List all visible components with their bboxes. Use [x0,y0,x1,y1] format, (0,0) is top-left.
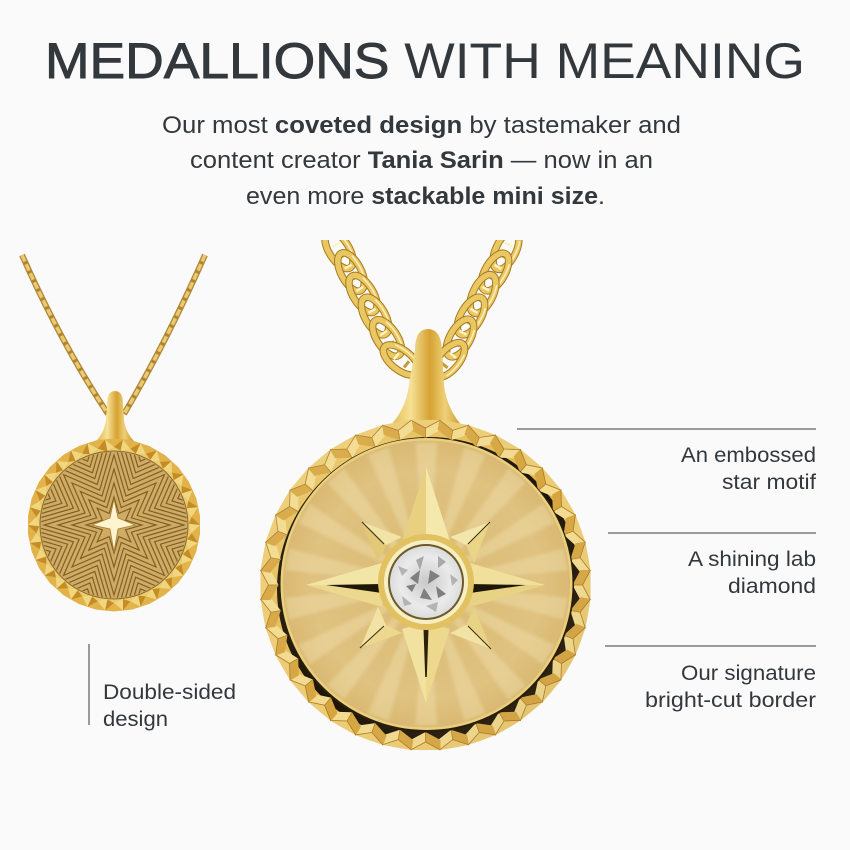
callout: double-sided design: design [103,708,168,731]
callout: lab diamond: A shining lab [688,548,816,571]
callout: lab diamond [688,548,816,598]
callout: bright-cut border: Our signature [681,662,816,685]
small pendant bail [96,391,134,441]
embossed ray disc [254,427,599,741]
callout: bright-cut border: bright-cut border [645,689,816,712]
small pendant: double-sided reverse [19,254,208,612]
callout line: embossed star motif [517,428,816,430]
subtitle text: Our most coveted design by tastemaker and [162,112,681,139]
thin shadow around disc [279,438,574,732]
title: MEDALLIONS WITH MEANING [45,33,805,89]
callout: double-sided design: Double-sided [103,681,236,704]
subtitle text [162,112,681,210]
bright-cut border teeth [247,407,604,763]
large pendant: front with lab diamond [260,240,591,750]
subtitle text: even more stackable mini size. [246,183,605,210]
subtitle text: content creator Tania Sarin — now in an [190,147,653,174]
small pendant chevron star face [40,450,188,600]
callout: double-sided design [103,681,236,731]
large pendant chain [321,240,523,380]
shadow crescent behind border teeth [277,437,581,741]
callout line: double-sided design [88,644,90,725]
lab diamond in bezel [378,534,474,630]
callout: lab diamond: diamond [728,575,816,598]
callout line: lab diamond [608,532,816,534]
small pendant chain [22,255,205,414]
diagonal points [360,522,491,649]
large pendant bail [388,329,464,428]
bright-cut border base [260,420,590,750]
callout: bright-cut border [645,662,816,712]
callout: embossed star motif [681,444,816,494]
callout line: bright-cut border [605,645,816,647]
border light overlay [260,420,591,750]
small pendant border [27,438,201,612]
callout: embossed star motif: An embossed [681,444,816,467]
callout: embossed star motif: star motif [722,471,816,494]
main points [306,467,545,703]
embossed star motif [306,467,545,703]
